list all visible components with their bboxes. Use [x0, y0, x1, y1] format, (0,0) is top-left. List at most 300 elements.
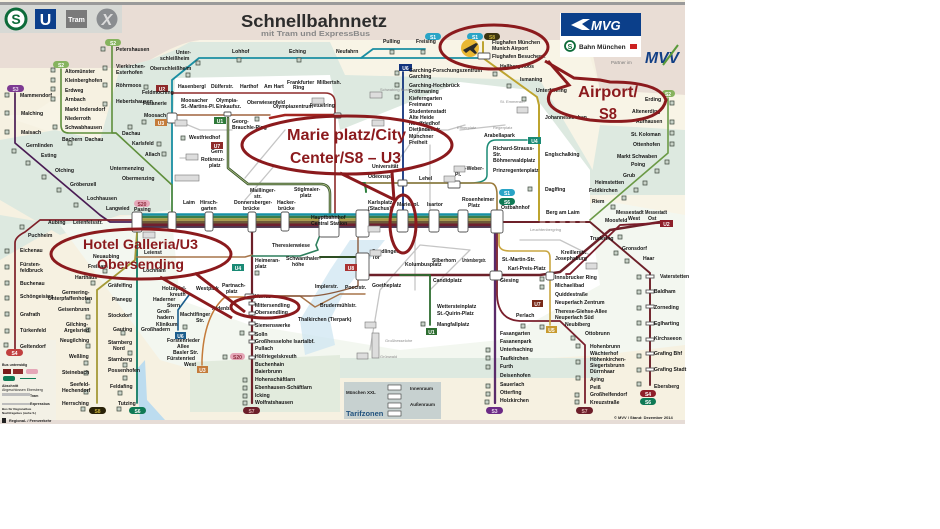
- tram line numbers: St. Emmeram: [500, 99, 525, 104]
- MVG logo panel: Bahn München: [579, 44, 626, 51]
- annotation: Hotel Galleria circle and callout: [51, 229, 299, 318]
- station labels: north-west: Esting: [41, 153, 57, 159]
- line end badges: S3: [12, 87, 19, 93]
- station labels: centre and north-east: Dietlindenstr.: [409, 127, 442, 133]
- annotation label: Hotel Galleria: Obersending: [97, 256, 184, 272]
- station labels: centre and north-east: Feldkirchen: [589, 188, 618, 194]
- station labels: south-west: Theresienwiese: [272, 243, 310, 249]
- panel: network map background: [0, 0, 685, 424]
- station labels: centre and north-east: Arabellapark: [484, 133, 515, 139]
- station labels: north-west: Bachern: [62, 137, 82, 143]
- U3 Moosach / Fürstenried: [137, 255, 252, 257]
- station labels: centre and north-east: Flughafen München: [492, 40, 540, 46]
- station labels: south-west: Höllriegelskreuth: [255, 354, 297, 360]
- station labels: north-west: Fasanerie: [143, 101, 167, 107]
- station labels: north-west: Dachau: [85, 137, 103, 143]
- station labels: north-west: Geltendorf: [20, 344, 46, 350]
- tram line numbers: Grünwald: [380, 354, 397, 359]
- station labels: north-west: platz: [300, 193, 312, 199]
- line end badges: U7: [534, 302, 541, 308]
- station labels: south-west: Allee: [177, 344, 189, 350]
- station labels: south-east: Taufkirchen: [500, 356, 528, 362]
- station labels: centre and north-east: Ebersberg: [654, 384, 679, 390]
- station labels: south-east: Fasanenpark: [500, 339, 532, 345]
- station labels: centre and north-east: Gronsdorf: [622, 246, 647, 252]
- icon: ExpressBus logo: X: [101, 12, 114, 29]
- station labels: north-west: Gern: [211, 149, 223, 155]
- station labels: south-west: Argelsried: [64, 328, 89, 334]
- station labels: north-west: Hebertshausen: [116, 99, 153, 105]
- station labels: centre and north-east: Fröttmaning: [409, 89, 439, 95]
- station labels: south-west: Groß-: [157, 309, 171, 315]
- station labels: centre and north-east: Böhmerwaldplatz: [493, 158, 536, 164]
- station labels: centre and north-east: Munich Airport: [492, 46, 528, 52]
- station labels: north-west: Kleinberghofen: [65, 78, 102, 84]
- station labels: north-west: Moosach: [144, 113, 166, 119]
- title: Schnellbahnnetz: [241, 11, 387, 31]
- line end badges: S20: [138, 202, 147, 208]
- icon: airport plane: [461, 39, 479, 57]
- station labels: south-east: Giesing: [500, 278, 519, 284]
- station labels: south-west: platz: [255, 264, 267, 270]
- station labels: south-west: Lochham: [143, 268, 166, 274]
- station labels: south-east: Sendlinger: [372, 249, 398, 255]
- station labels: south-west: Hohenschäftlarn: [255, 377, 295, 383]
- MVG logo panel: [560, 13, 641, 57]
- station labels: north-west: Allach: [145, 152, 160, 158]
- line end badges: U6: [177, 334, 184, 340]
- line end badges: S2: [665, 92, 671, 98]
- station labels: south-west: hadern: [157, 315, 174, 321]
- station labels: north-west: Puchheim: [28, 233, 53, 239]
- S2 Erding: [590, 98, 668, 220]
- icon: Tram logo: [66, 10, 87, 28]
- station labels: south-west: Starnberg: [108, 357, 132, 363]
- legend: left: Abschnitt: [2, 384, 19, 388]
- legend: Tarifzonen: [344, 382, 441, 419]
- station labels: north-west: [20, 47, 342, 350]
- line end badges: U5: [548, 328, 555, 334]
- station labels: south-west: Hechendorf: [62, 388, 91, 394]
- station labels: centre and north-east: [336, 39, 689, 390]
- station labels: centre and north-east: Haar: [643, 256, 654, 262]
- station labels: south-west: Holzapfel-: [162, 286, 187, 292]
- U5 / S3 Holzkirchen: [494, 228, 496, 403]
- station labels: south-west: Westpark: [196, 286, 219, 292]
- station labels: north-west: Dülferstr.: [211, 84, 234, 90]
- station labels: north-west: Niederroth: [65, 116, 91, 122]
- station labels: south-west: höhe: [292, 262, 304, 268]
- legend: left: Expressbus: [30, 402, 50, 406]
- legend: Tarifzonen: Innenraum: [410, 386, 433, 391]
- station labels: south-west: Forstenrieder: [167, 338, 200, 344]
- annotation label: airport: S8: [599, 106, 617, 123]
- station labels: north-west: Karlsfeld: [132, 141, 154, 147]
- tram line numbers: Regerplatz: [493, 125, 512, 130]
- station labels: south-east: Holzkirchen: [500, 398, 529, 404]
- station labels: north-west: Olympiazentrum: [273, 104, 313, 110]
- station labels: north-west: Harthof: [240, 84, 258, 90]
- station labels: south-west: Harthaus: [75, 275, 97, 281]
- station labels: south-west: Unterpfaffenhofen: [48, 296, 92, 302]
- S2 Petershausen / Altomünster: [112, 46, 116, 133]
- station labels: south-east: Candidplatz: [433, 278, 462, 284]
- station labels: south-east: St.-Quirin-Platz: [437, 311, 474, 317]
- station labels: south-east: Fasangarten: [500, 331, 530, 337]
- legend: left: Bus unterwidig: [2, 363, 27, 367]
- icon: S-Bahn logo: S: [11, 11, 21, 27]
- station labels: north-west: brücke: [278, 206, 295, 212]
- station labels: centre and north-east: Josephsburg: [555, 256, 587, 262]
- station labels: south-west: Klinikum: [156, 322, 178, 328]
- line end badges: U7: [214, 144, 220, 150]
- station labels: centre and north-east: Garching: [409, 74, 431, 80]
- station labels: south-west: Feldafing: [110, 384, 133, 390]
- U2 red: [172, 93, 335, 220]
- station labels: south-west: Steinebach: [62, 370, 89, 376]
- station labels: north-west: Brauchle-Ring: [232, 125, 267, 131]
- station labels: south-west: Basler Str.: [173, 350, 199, 356]
- station labels: centre and north-east: Ismaning: [520, 77, 542, 83]
- station labels: south-west: Hauptbahnhof: [311, 215, 346, 221]
- MVG logo panel: MVG: [591, 18, 621, 33]
- station labels: south-west: Pullach: [255, 346, 273, 352]
- station labels: north-west: Schwabhausen: [65, 125, 102, 131]
- line end badges: S4: [11, 351, 18, 357]
- line end badges: S8: [489, 35, 495, 41]
- station labels: centre and north-east: Platz: [468, 203, 480, 209]
- line end badges: U6: [402, 66, 409, 72]
- station labels: south-east: Neubiberg: [565, 322, 590, 328]
- station labels: north-west: Schöngeising: [20, 294, 53, 300]
- station labels: north-west: Langwied: [106, 206, 130, 212]
- legend: left: Bus für Regionalbus: [2, 407, 32, 411]
- station labels: centre and north-east: Trudering: [590, 236, 614, 242]
- station labels: centre and north-east: Garching-Hochbrück: [409, 83, 460, 89]
- station labels: south-west: Freiham: [88, 264, 108, 270]
- station labels: south-east: Karl-Preis-Platz: [508, 266, 546, 272]
- Isar river and Starnberger See: [136, 360, 165, 420]
- station labels: south-east: Ottobrunn: [585, 331, 610, 337]
- station labels: north-west: Olching: [55, 168, 74, 174]
- southern U lines: [252, 294, 365, 307]
- icon: S-Bahn logo: [6, 9, 26, 29]
- station labels: centre and north-east: Garching-Forschungszentrum: [409, 68, 482, 74]
- station labels: centre and north-east: Isartor: [427, 202, 443, 208]
- station labels: north-west: Vierkirchen-: [116, 64, 146, 70]
- station labels: centre and north-east: Ostbahnhof: [501, 205, 530, 211]
- S3 Mammendorf: [15, 93, 137, 222]
- station labels: north-west: Altomünster: [65, 69, 95, 75]
- station labels: centre and north-east: Kirchseeon: [654, 336, 682, 342]
- station labels: south-east: Goetheplatz: [372, 283, 402, 289]
- station labels: south-west: Fürstenried: [167, 356, 195, 362]
- station labels: north-west: Hacker-: [277, 200, 296, 206]
- station labels: south-west: Neuaubing: [93, 254, 119, 260]
- station labels: centre and north-east: Hallbergmoos: [500, 64, 534, 70]
- station labels: south-west: Starnberg: [108, 340, 132, 346]
- station labels: south-west: Poccistr.: [345, 285, 367, 291]
- station labels: north-west: Mammendorf: [20, 93, 52, 99]
- station labels: south-west: Mittersendling: [255, 303, 290, 309]
- station labels: south-west: Harras: [255, 294, 271, 300]
- station labels: south-east: Wächterhof: [590, 351, 618, 357]
- station labels: north-west: Erdweg: [65, 88, 83, 94]
- station labels: centre and north-east: Karlsplatz: [368, 200, 393, 206]
- station labels: north-west: feldbruck: [20, 268, 43, 274]
- line end badges: S8: [94, 409, 101, 415]
- station labels: centre and north-east: Freiheit: [409, 140, 428, 146]
- line end badges: U4: [531, 139, 538, 145]
- station labels: centre and north-east: Erding: [645, 97, 661, 103]
- tram line numbers: Leuchtenbergring: [530, 227, 561, 232]
- station labels: centre and north-east: Messestadt: [645, 210, 667, 216]
- station labels: south-east: Silberhorn: [432, 258, 456, 264]
- line end badges: S6: [134, 409, 141, 415]
- legend: Tarifzonen: München XXL: [346, 390, 376, 395]
- station labels: south-west: Nord: [113, 346, 125, 352]
- legend: Tarifzonen: Tarifzonen: [346, 409, 384, 418]
- station labels: centre and north-east: Johanneskirchen: [545, 115, 587, 121]
- station labels: north-west: Gröbenzell: [70, 182, 97, 188]
- line end badges: S2: [110, 41, 116, 47]
- station labels: centre and north-east: Vaterstetten: [660, 274, 689, 280]
- station labels: south-east: Aying: [590, 377, 604, 383]
- annotation: Marienplatz circle and callout: [242, 116, 452, 253]
- station labels: south-west: Solln: [255, 332, 267, 338]
- station labels: north-west: Eching: [289, 49, 306, 55]
- station labels: south-east: Siegertsbrunn: [590, 363, 625, 369]
- station labels: south-east: Großhelfendorf: [590, 392, 627, 398]
- station labels: south-west: Central Station: [311, 221, 347, 227]
- S6 Tutzing, S8 Herrsching, S7 Wolfratshausen: [136, 228, 138, 403]
- station labels: centre and north-east: Markt Schwaben: [617, 154, 657, 160]
- station labels: south-west: Stern: [167, 303, 180, 309]
- station labels: north-west: Eichenau: [20, 248, 43, 254]
- station labels: south-west: Siemenswerke: [255, 323, 291, 329]
- station labels: south-west: kreuth: [170, 292, 186, 298]
- tram line numbers: [143, 87, 597, 359]
- station labels: north-west: Frankfurter: [287, 80, 314, 86]
- station labels: south-west: Implerstr.: [315, 284, 339, 290]
- station labels: centre and north-east: Universität: [372, 164, 399, 170]
- station labels: north-west: Hirsch-: [200, 200, 218, 206]
- station labels: north-west: Petershausen: [116, 47, 149, 53]
- station labels: centre and north-east: Heimstetten: [595, 180, 624, 186]
- line end badges: U1: [217, 119, 223, 125]
- station labels: north-west: Georg-: [232, 119, 249, 125]
- MVV logo: [611, 45, 680, 67]
- station labels: south-west: Icking: [255, 393, 270, 399]
- U2 Messestadt: [566, 223, 660, 274]
- station labels: south-west: Planegg: [112, 297, 132, 303]
- station labels: centre and north-east: Max-Weber-: [455, 166, 484, 172]
- station labels: south-west: Brudermühlstr.: [320, 303, 357, 309]
- station labels: north-west: Lochhausen: [87, 196, 117, 202]
- legend: Tarifzonen: Außenraum: [410, 402, 435, 407]
- station labels: north-west: Petuelring: [310, 103, 335, 109]
- annotation label: airport: Airport/: [578, 84, 639, 101]
- station labels: south-west: Str.: [196, 318, 205, 324]
- legend: left: [2, 363, 52, 423]
- station labels: centre and north-east: Str.: [493, 152, 502, 158]
- station labels: south-west: Partnach-: [222, 283, 246, 289]
- station labels: centre and north-east: Neufahrn: [336, 49, 358, 55]
- station labels: centre and north-east: Moosfeld: [605, 218, 627, 224]
- station labels: north-west: Oberschleißheim: [150, 66, 192, 72]
- station labels: centre and north-east: Marienpl.: [397, 202, 420, 208]
- line end badges: U1: [428, 330, 435, 336]
- station labels: south-west: platz: [226, 289, 238, 295]
- station labels: north-west: Oberwiesenfeld: [247, 100, 285, 106]
- station labels: south-west: Buchenhain: [255, 362, 284, 368]
- station labels: south-west: Wolfratshausen: [255, 400, 293, 406]
- S4/S6 Ebersberg: [500, 222, 650, 385]
- station labels: centre and north-east: Altenerding: [632, 109, 660, 115]
- station labels: centre and north-east: Freimann: [409, 102, 432, 108]
- station labels: south-east: Michaelibad: [555, 283, 584, 289]
- station labels: north-west: Obermenzing: [122, 176, 155, 182]
- line end badges: S1: [472, 35, 478, 41]
- station labels: north-west: Fürsten-: [20, 262, 41, 268]
- station labels: north-west: Leienfelsstr.: [73, 220, 103, 226]
- station labels: centre and north-east: Grafing Bhf: [654, 351, 682, 357]
- station labels: centre and north-east: Pl.: [455, 172, 462, 178]
- station labels: centre and north-east: Messestadt: [616, 210, 644, 216]
- line end badges: S2: [58, 63, 64, 69]
- station labels: south-east: Dürrnhaar: [590, 369, 615, 375]
- line end badges: S20: [233, 355, 242, 361]
- trunk stations: [132, 53, 654, 371]
- station labels: north-west: Türkenfeld: [20, 328, 46, 334]
- station labels: south-west: Leienst: [144, 250, 162, 256]
- station labels: north-west: Rotkreuz-: [201, 157, 225, 163]
- tram line numbers: Effnerplatz: [457, 125, 476, 130]
- icon: U-Bahn logo: [35, 9, 56, 29]
- station labels: north-west: Maisach: [21, 130, 41, 136]
- annotation label: Hotel Galleria: [83, 236, 198, 272]
- station labels: north-west: Westfriedhof: [189, 135, 220, 141]
- U1 / U7 inner greens: [172, 114, 270, 116]
- U4 / U5 Arabellapark: [370, 140, 527, 183]
- station labels: south-east: Perlach: [516, 313, 534, 319]
- station labels: south-east: Kolumbusplatz: [405, 262, 442, 268]
- station labels: south-east: Neuperlach Süd: [555, 315, 594, 321]
- S-Bahn south ring: [360, 222, 660, 275]
- annotation label: Marienplatz: Marie platz/City: [287, 127, 406, 144]
- line end badges: S6: [645, 400, 651, 406]
- station labels: centre and north-east: Grub: [623, 173, 635, 179]
- station labels: north-west: Am Hart: [264, 84, 284, 90]
- station labels: north-west: Ring: [293, 85, 304, 91]
- line end badges: S4: [645, 392, 651, 398]
- line end badges: U2: [159, 87, 165, 93]
- station labels: centre and north-east: Rosenheimer: [462, 197, 494, 203]
- icon: ExpressBus logo: [96, 8, 118, 30]
- station labels: south-east: Tor: [372, 255, 380, 261]
- station labels: centre and north-east: Odeonspl.: [368, 174, 393, 180]
- line end badges: S1: [504, 191, 510, 197]
- station labels: north-west: Gernlinden: [26, 143, 53, 149]
- station labels: south-west: Seefeld-: [70, 382, 90, 388]
- station labels: north-west: Aubing: [48, 220, 66, 226]
- station labels: south-west: Baierbrunn: [255, 369, 282, 375]
- station labels: centre and north-east: Richard-Strauss-: [493, 146, 534, 152]
- station labels: south-east: Mangfallplatz: [437, 322, 470, 328]
- station labels: north-west: brücke: [243, 206, 260, 212]
- station labels: centre and north-east: Freising: [416, 39, 436, 45]
- station labels: south-west: Geisenbrunn: [58, 307, 89, 313]
- station labels: centre and north-east: Riem: [592, 199, 605, 205]
- line end badges: U3: [199, 368, 206, 374]
- station labels: north-west: Arnbach: [65, 97, 86, 103]
- station labels: north-west: Hasenbergl: [178, 84, 206, 90]
- station labels: centre and north-east: Lehel: [419, 176, 433, 182]
- station labels: north-west: Maillinger-: [250, 188, 276, 194]
- main trunk: [137, 213, 497, 216]
- station labels: north-west: Olympia-: [216, 98, 238, 104]
- station labels: north-west: platz: [209, 163, 221, 169]
- park and ride markers: [4, 47, 674, 411]
- station labels: centre and north-east: Prinzregentenplatz: [493, 168, 539, 174]
- station labels: south-west: Machtlfinger: [180, 312, 210, 318]
- station labels: north-west: Röhrmoos: [116, 83, 142, 89]
- S4 Geltendorf: [15, 220, 132, 350]
- station labels: south-east: Neuperlach Zentrum: [555, 300, 605, 306]
- station labels: south-east: [372, 249, 627, 406]
- station labels: south-east: Peiß: [590, 385, 601, 391]
- annotation label: Hotel Galleria: Hotel Galleria/U3: [83, 236, 198, 252]
- station labels: south-east: Höhenkirchen-: [590, 357, 626, 363]
- station labels: north-west: Unter-: [176, 50, 191, 56]
- station labels: south-west: Stockdorf: [108, 313, 132, 319]
- station labels: north-west: Grafrath: [20, 312, 40, 318]
- station labels: north-west: Feldmoching: [142, 90, 174, 96]
- line end badges: [6, 33, 675, 415]
- station labels: south-east: Quiddestraße: [555, 292, 588, 298]
- station labels: centre and north-east: Englschalking: [545, 152, 580, 158]
- station labels: south-west: Thalkirchen (Tierpark): [298, 317, 352, 323]
- station labels: north-west: schleißheim: [160, 56, 190, 62]
- station labels: centre and north-east: Studentenstadt: [409, 109, 446, 115]
- U6 Garching: [402, 72, 404, 215]
- line end badges: U8: [348, 266, 354, 272]
- station labels: north-west: Buchenau: [20, 281, 45, 287]
- station labels: south-east: St.-Martin-Str.: [502, 257, 536, 263]
- station labels: north-west: Stiglmaier-: [294, 187, 321, 193]
- station labels: north-west: Einkaufsz.: [216, 104, 242, 110]
- station labels: centre and north-east: West: [628, 216, 640, 222]
- station labels: south-west: Gauting: [113, 327, 132, 333]
- station labels: north-west: Markt Indersdorf: [65, 107, 105, 113]
- station labels: centre and north-east: Zorneding: [654, 305, 679, 311]
- station labels: south-west: Schwanthaler-: [286, 256, 321, 262]
- line end badges: S7: [581, 409, 588, 415]
- MVV logo: Partner im: [611, 60, 632, 65]
- station labels: south-west: Ebenhausen-Schäftlarn: [255, 385, 312, 391]
- station labels: north-west: Pasing: [134, 207, 151, 213]
- station labels: centre and north-east: Flughafen Besucherp.: [492, 54, 546, 60]
- station labels: centre and north-east: St. Koloman: [631, 132, 661, 138]
- legend: left: Tram: [30, 394, 38, 398]
- station labels: north-west: Lohhof: [232, 49, 250, 55]
- annotation label: Marienplatz: [287, 127, 406, 167]
- station labels: south-east: Unterhaching: [500, 347, 533, 353]
- station labels: centre and north-east: Nordfriedhof: [409, 121, 440, 127]
- copyright note: © MVV / Stand: Dezember 2014: [614, 415, 674, 420]
- station labels: south-west: Heimeran-: [255, 258, 280, 264]
- line end badges: S7: [248, 409, 255, 415]
